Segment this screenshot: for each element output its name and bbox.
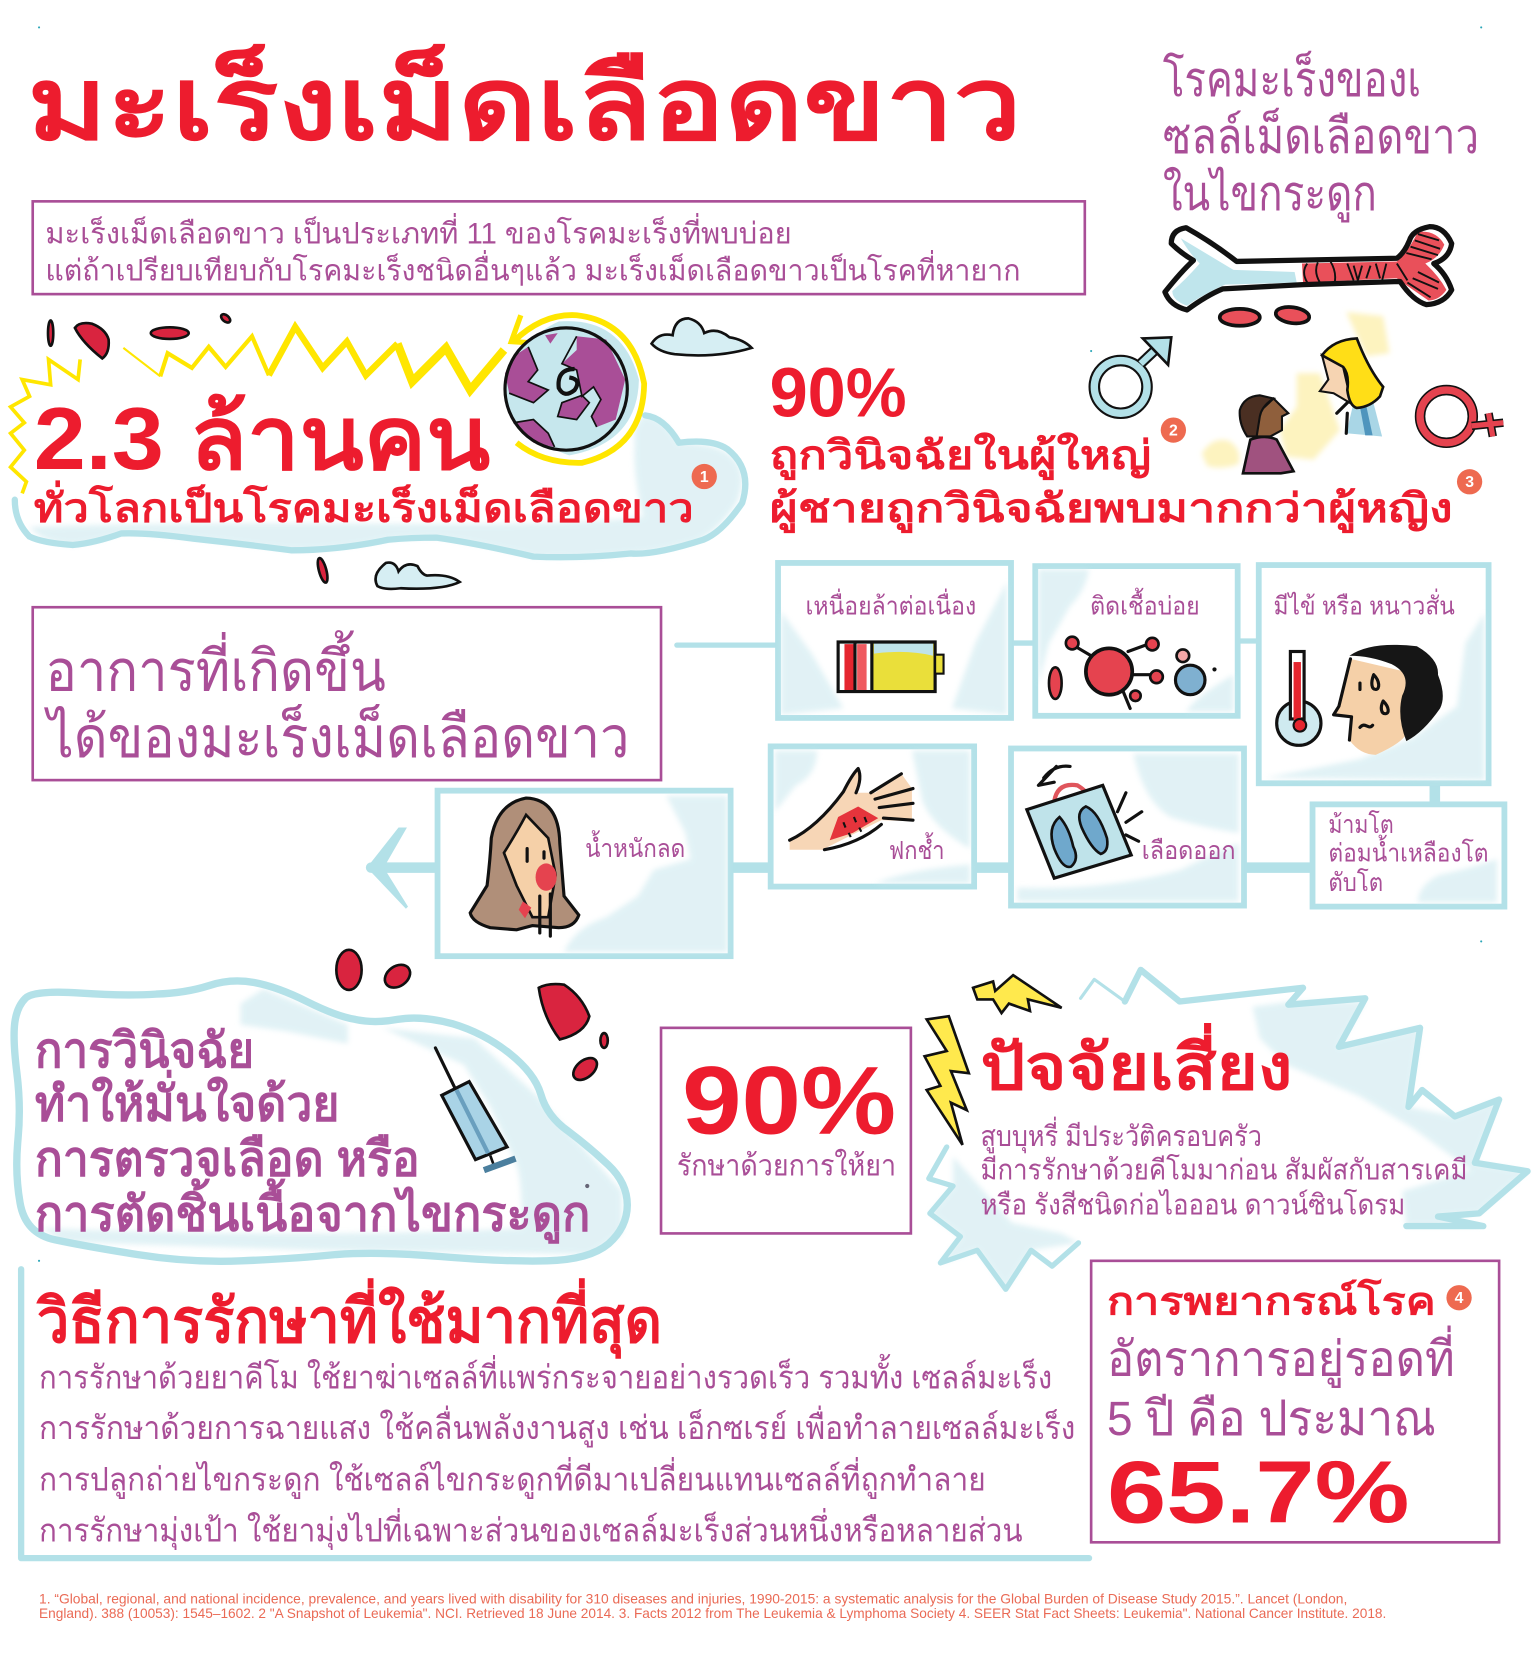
badge 2: 2	[1169, 422, 1178, 439]
panel: risk factors starburst: ปัจจัยเสี่ยง	[980, 1023, 1292, 1103]
badge 4	[1446, 1285, 1472, 1310]
badge 2	[1161, 417, 1186, 443]
panel: weight loss: น้ำหนักลด	[585, 830, 685, 863]
icon: droplet and cloud below bubble	[316, 557, 460, 589]
subtitle: bone marrow cancer: ในไขกระดูก	[1163, 166, 1377, 223]
connector lines between symptoms	[371, 641, 1435, 868]
panel: fatigue: เหนื่อยล้าต่อเนื่อง	[805, 589, 976, 621]
icon: female symbol	[1420, 390, 1503, 443]
icon: woman coughing blood	[470, 798, 579, 936]
badge 1	[692, 464, 717, 489]
stat box: 90% treated with medication: 90%	[682, 1045, 896, 1154]
panel: risk factors starburst: หรือ รังสีชนิดก่อไอออน ดาวน์ซินโดรม	[980, 1188, 1405, 1221]
panel: diagnosis bubble: การตรวจเลือด หรือ	[35, 1132, 420, 1186]
icon: two people	[1202, 312, 1389, 473]
stat box: 90% treated with medication: รักษาด้วยการให้ยา	[677, 1148, 896, 1182]
panel: diagnosis bubble: การวินิจฉัย	[35, 1024, 254, 1078]
icon: blood droplets above diagnosis	[336, 950, 608, 1084]
icon: male symbol	[1094, 337, 1171, 413]
panel: enlarged spleen, lymph nodes, liver: ตับโต	[1328, 868, 1383, 897]
badge 1: 1	[700, 469, 709, 486]
subtitle: bone marrow cancer	[1163, 50, 1479, 223]
panel: prognosis: 5 ปี คือ ประมาณ	[1107, 1392, 1436, 1446]
intro text box	[33, 201, 1085, 294]
panel: prognosis	[1091, 1261, 1499, 1542]
panel: risk factors starburst: มีการรักษาด้วยคีโมมาก่อน สัมผัสกับสารเคมี	[980, 1154, 1467, 1187]
panel: prognosis: อัตราการอยู่รอดที่	[1107, 1326, 1455, 1389]
panel: most common treatments: การรักษาด้วยการฉายแสง ใช้คลื่นพลังงานสูง เช่น เอ็กซเรย์ เพื่อทำลายเซลล์มะเร็ง	[39, 1405, 1075, 1448]
intro text box: มะเร็งเม็ดเลือดขาว เป็นประเภทที่ 11 ของโรคมะเร็งที่พบบ่อย	[45, 213, 792, 251]
panel: frequent infections	[1035, 566, 1238, 716]
stat: 90% adults: 90%	[770, 353, 907, 431]
badge 3: 3	[1465, 474, 1474, 491]
panel: most common treatments: การปลูกถ่ายไขกระดูก ใช้เซลล์ไขกระดูกที่ดีมาเปลี่ยนแทนเซลล์ที่ถูกทำลาย	[39, 1457, 986, 1500]
icon: scale	[1027, 766, 1142, 878]
heading box: symptoms: ได้ของมะเร็งเม็ดเลือดขาว	[44, 704, 629, 770]
badge 3	[1457, 469, 1482, 494]
panel: fever or chills	[1259, 565, 1489, 783]
intro text box: แต่ถ้าเปรียบเทียบกับโรคมะเร็งชนิดอื่นๆแล้ว มะเร็งเม็ดเลือดขาวเป็นโรคที่หายาก	[45, 249, 1021, 287]
stat box: 90% treated with medication	[661, 1028, 911, 1233]
panel: fever or chills: มีไข้ หรือ หนาวสั่น	[1274, 589, 1455, 621]
panel: risk factors starburst	[925, 970, 1528, 1289]
panel: most common treatments: การรักษาด้วยยาคีโม ใช้ยาฆ่าเซลล์ที่แพร่กระจายอย่างรวดเร็ว รวมทั้ง เซลล์มะเร็ง	[39, 1353, 1052, 1395]
icon: bone with marrow	[1165, 227, 1452, 310]
panel: bleeding: เลือดออก	[1142, 837, 1236, 865]
panel: most common treatments: วิธีการรักษาที่ใช้มากที่สุด	[36, 1278, 662, 1359]
panel: global cases bubble	[15, 415, 745, 557]
panel: enlarged spleen, lymph nodes, liver: ต่อมน้ำเหลืองโต	[1328, 834, 1489, 867]
panel: enlarged spleen, lymph nodes, liver: ม้ามโต	[1328, 810, 1394, 839]
panel: bruising: ฟกช้ำ	[889, 832, 945, 865]
icon: blood droplets top left	[48, 313, 232, 358]
icon: blood cells under bone	[1220, 305, 1310, 326]
panel: diagnosis bubble: การตัดชิ้นเนื้อจากไขกระดูก	[35, 1177, 590, 1244]
badge 4: 4	[1455, 1290, 1464, 1307]
panel: bruising	[771, 746, 974, 887]
icon: cloud right of globe	[652, 318, 752, 355]
heading box: symptoms	[33, 607, 661, 780]
panel: prognosis: การพยากรณ์โรค	[1107, 1279, 1436, 1324]
panel: weight loss	[438, 791, 731, 956]
panel: diagnosis bubble: ทำให้มั่นใจด้วย	[35, 1070, 339, 1132]
icon: syringe	[435, 1048, 516, 1170]
icon: lightning bolts	[925, 975, 1062, 1145]
heading box: symptoms: อาการที่เกิดขึ้น	[45, 631, 386, 704]
decorative yellow zigzag	[11, 327, 504, 493]
footnotes: England). 388 (10053): 1545–1602. 2 "A Snapshot of Leukemia". NCI. Retrieved 18 June 2014. 3. Facts 2012 from The Leukemia & Lymphoma Society 4. SEER Stat Fact Sheets: Leukemia". National Cancer Institute. 2018.	[39, 1606, 1386, 1621]
footnotes	[39, 1591, 1386, 1621]
panel: fatigue	[778, 563, 1011, 718]
stat: 2.3 million people: 2.3 ล้านคน	[34, 389, 490, 488]
text: diagnosed in adults: ถูกวินิจฉัยในผู้ใหญ่	[770, 432, 1151, 480]
subtitle: bone marrow cancer: ซลล์เม็ดเลือดขาว	[1163, 107, 1479, 164]
icon: globe	[505, 315, 644, 463]
panel: most common treatments: การรักษามุ่งเป้า ใช้ยามุ่งไปที่เฉพาะส่วนของเซลล์มะเร็งส่วนหนึ่งหรือหลายส่วน	[39, 1507, 1023, 1550]
subtitle: bone marrow cancer: โรคมะเร็งของเ	[1163, 50, 1421, 107]
panel: frequent infections: ติดเชื้อบ่อย	[1090, 588, 1200, 621]
icon: sweating face	[1334, 645, 1443, 755]
title: มะเร็งเม็ดเลือดขาว	[27, 42, 1022, 161]
panel: bleeding	[1011, 748, 1244, 906]
panel: prognosis: 65.7%	[1107, 1442, 1410, 1541]
icon: thermometer	[1277, 652, 1321, 745]
arrow: symptom flow	[367, 828, 408, 909]
text: worldwide with leukemia: ทั่วโลกเป็นโรคมะเร็งเม็ดเลือดขาว	[34, 480, 694, 531]
panel: enlarged spleen, lymph nodes, liver	[1313, 804, 1504, 907]
panel: diagnosis bubble	[14, 981, 627, 1261]
panel: most common treatments	[21, 1269, 1089, 1558]
icon: bruised hand	[790, 769, 913, 850]
icon: battery	[838, 642, 944, 692]
footnotes: 1. “Global, regional, and national incidence, prevalence, and years lived with disability for 310 diseases and injuries, 1990-2015: a systematic analysis for the Global Burden of Disease Study 2015.”. Lancet (London,	[39, 1591, 1347, 1606]
panel: risk factors starburst: สูบบุหรี่ มีประวัติครอบครัว	[980, 1117, 1262, 1154]
text: men more than women: ผู้ชายถูกวินิจฉัยพบมากกว่าผู้หญิง	[770, 487, 1453, 533]
icon: cells	[1049, 637, 1217, 708]
